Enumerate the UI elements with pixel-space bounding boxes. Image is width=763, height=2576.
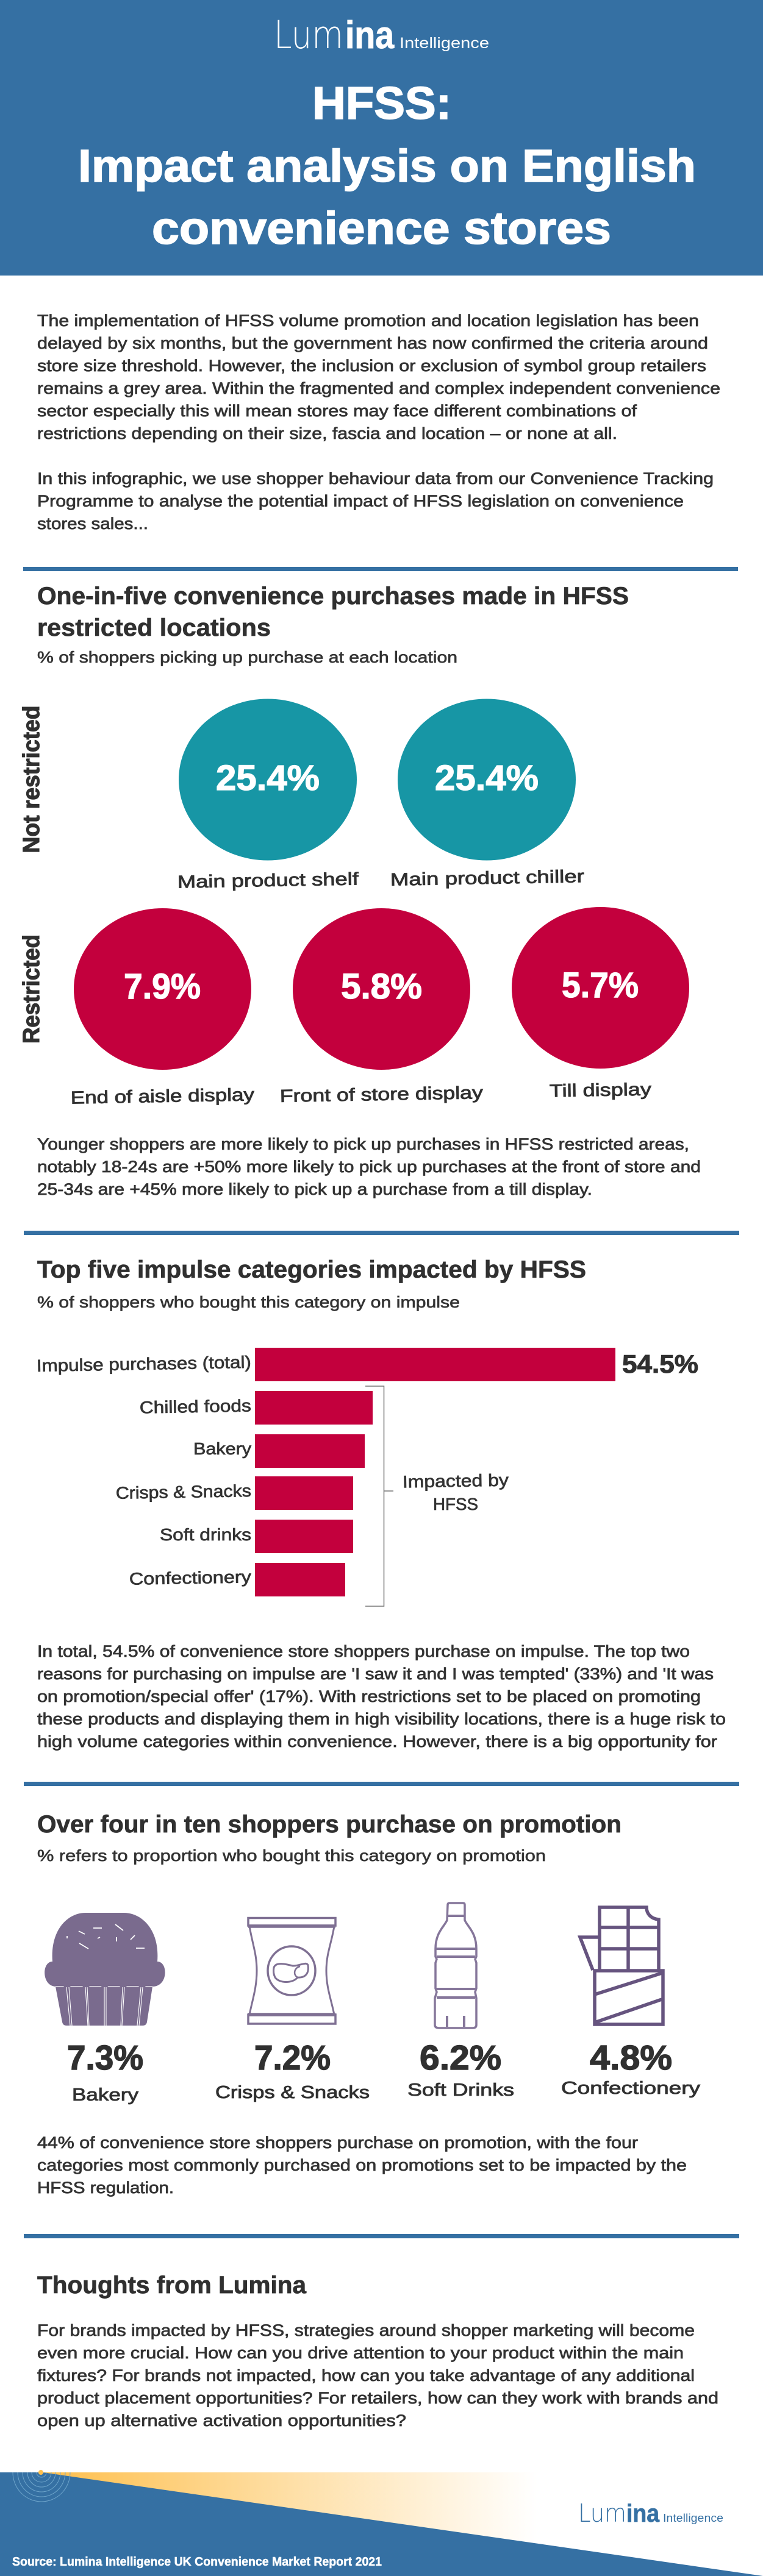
logo: Lumina Intelligence: ina [345, 14, 395, 57]
bar chart: Impulse purchases (total) [37, 1353, 251, 1375]
stat: bakery [67, 2038, 143, 2105]
bar chart: 54.5% [622, 1350, 698, 1378]
decoration: concentric arcs [13, 2472, 70, 2502]
bar chart: Chilled foods [140, 1396, 251, 1417]
text block: introduction: remains a grey area. Within the fragmented and complex independent convenience [37, 379, 720, 397]
stat: front of store display: Front of store display [280, 1083, 484, 1106]
stat: end of aisle display [71, 908, 255, 1108]
text block: promotion commentary [37, 2133, 687, 2197]
text block: introduction [37, 311, 720, 533]
text block: impulse commentary: reasons for purchasing on impulse are 'I saw it and I was tempted' (33%) and 'It was [37, 1665, 714, 1683]
text block: introduction: sector especially this will mean stores may face different combinations of [37, 402, 637, 420]
panel: purchase locations [19, 583, 701, 1198]
stat: bakery: Bakery [72, 2085, 139, 2105]
stat: confectionery: Confectionery [561, 2079, 701, 2098]
stat: crisps and snacks: 7.2% [254, 2038, 331, 2077]
stat: end of aisle display: End of aisle display [71, 1085, 255, 1108]
label: not restricted: Not restricted [19, 706, 45, 853]
text block: promotion commentary: categories most commonly purchased on promotions set to be impacted by the [37, 2156, 687, 2174]
subheading: % of shoppers picking up purchase at each location [37, 648, 457, 666]
logo: Lumina Intelligence footer: Intelligence [663, 2512, 723, 2524]
stat: soft drinks [407, 2038, 514, 2100]
text block: younger shoppers: 25-34s are +45% more likely to pick up a purchase from a till display. [37, 1180, 592, 1198]
heading: one-in-five [37, 583, 629, 641]
text block: introduction: store size threshold. However, the inclusion or exclusion of symbol group retailers [37, 357, 706, 375]
source: Source: Lumina Intelligence UK Convenience Market Report 2021 [12, 2555, 382, 2569]
icon: crisps bag [248, 1918, 335, 2024]
text block: introduction: In this infographic, we use shopper behaviour data from our Convenience Tracking [37, 469, 714, 488]
title [78, 77, 696, 254]
icon: cupcake [45, 1913, 165, 2026]
panel: impulse categories [37, 1256, 726, 1751]
panel: header [0, 0, 763, 276]
text block: introduction: restrictions depending on their size, fascia and location – or none at all. [37, 424, 617, 443]
icon: bottle [435, 1903, 476, 2028]
stat: soft drinks: Soft Drinks [407, 2080, 514, 2100]
text block: introduction: Programme to analyse the potential impact of HFSS legislation on convenience [37, 492, 684, 510]
text block: introduction: delayed by six months, but the government has now confirmed the criteria around [37, 334, 708, 352]
text block: impulse commentary: high volume categories within convenience. However, there is a big opportunity for [37, 1732, 717, 1751]
stat: soft drinks: 6.2% [420, 2038, 501, 2077]
text block: introduction: The implementation of HFSS volume promotion and location legislation has been [37, 311, 699, 330]
bar chart: Confectionery [129, 1567, 251, 1589]
stat: main product shelf: Main product shelf [177, 869, 359, 892]
bar chart: Bakery [193, 1439, 251, 1458]
heading: over four in ten: Over four in ten shoppers purchase on promotion [37, 1811, 622, 1838]
stat: main product shelf: 25.4% [216, 758, 320, 798]
bracket: impacted by HFSS [365, 1386, 509, 1606]
stat: till display [512, 907, 689, 1101]
stat: main product shelf [177, 699, 359, 892]
heading: top five: Top five impulse categories impacted by HFSS [37, 1256, 586, 1283]
text block: thoughts: fixtures? For brands not impacted, how can you take advantage of any additional [37, 2366, 695, 2385]
stat: till display: 5.7% [562, 966, 639, 1005]
heading: thoughts: Thoughts from Lumina [37, 2272, 307, 2299]
heading: one-in-five: restricted locations [37, 614, 271, 641]
text block: impulse commentary: In total, 54.5% of convenience store shoppers purchase on impulse. The top two [37, 1642, 690, 1660]
logo: Lumina Intelligence [274, 13, 489, 57]
text block: younger shoppers: notably 18-24s are +50% more likely to pick up purchases at the front of store and [37, 1158, 701, 1176]
logo: Lumina Intelligence footer [578, 2499, 723, 2528]
stat: bakery: 7.3% [67, 2038, 143, 2077]
stat: main product chiller: 25.4% [435, 758, 539, 798]
subheading: % of shoppers who bought this category on impulse [37, 1293, 460, 1311]
logo: Lumina Intelligence footer: Lum [578, 2499, 626, 2528]
panel: promotion [37, 1811, 701, 2197]
logo: Lumina Intelligence footer: ina [626, 2499, 660, 2527]
bar chart [37, 1348, 698, 1596]
text block: thoughts: even more crucial. How can you drive attention to your product within the main [37, 2344, 684, 2362]
panel: footer [0, 2470, 763, 2576]
text block: thoughts: For brands impacted by HFSS, strategies around shopper marketing will become [37, 2321, 695, 2339]
title: Impact analysis on English [78, 140, 696, 191]
bar chart: Crisps & Snacks [116, 1481, 251, 1503]
text block: younger shoppers [37, 1135, 701, 1198]
stat: crisps and snacks: Crisps & Snacks [215, 2083, 370, 2102]
stat: front of store display [280, 908, 484, 1106]
text block: impulse commentary: these products and displaying them in high visibility locations, there is a huge risk to [37, 1710, 726, 1728]
text block: thoughts: open up alternative activation opportunities? [37, 2411, 406, 2430]
stat: front of store display: 5.8% [341, 967, 422, 1006]
stat: crisps and snacks [215, 2038, 370, 2102]
bar chart: Soft drinks [160, 1525, 251, 1544]
logo: Lumina Intelligence: Intelligence [399, 35, 489, 52]
stat: confectionery: 4.8% [590, 2038, 672, 2077]
text block: thoughts: product placement opportunities? For retailers, how can they work with brands and [37, 2389, 718, 2407]
title: convenience stores [152, 202, 611, 254]
icon: chocolate bar [580, 1907, 663, 2024]
label: restricted: Restricted [19, 934, 45, 1044]
bracket: impacted by HFSS: Impacted by [403, 1470, 509, 1492]
logo: Lumina Intelligence: Lum [274, 13, 343, 57]
stat: end of aisle display: 7.9% [124, 967, 201, 1006]
stat: confectionery [561, 2038, 701, 2098]
text block: younger shoppers: Younger shoppers are more likely to pick up purchases in HFSS restricted areas, [37, 1135, 689, 1153]
panel: thoughts from Lumina [37, 2272, 718, 2430]
stat: main product chiller [390, 699, 585, 890]
stat: main product chiller: Main product chiller [390, 867, 585, 890]
text block: thoughts [37, 2321, 718, 2430]
subheading: % refers to proportion who bought this category on promotion [37, 1846, 546, 1865]
bracket: impacted by HFSS: HFSS [433, 1495, 478, 1514]
heading: one-in-five: One-in-five convenience purchases made in HFSS [37, 583, 629, 610]
icon: orange dot [38, 2470, 43, 2475]
text block: introduction: stores sales... [37, 514, 148, 533]
text block: promotion commentary: 44% of convenience store shoppers purchase on promotion, with the four [37, 2133, 638, 2152]
title: HFSS: [312, 77, 451, 129]
text block: promotion commentary: HFSS regulation. [37, 2179, 174, 2197]
text block: impulse commentary [37, 1642, 726, 1751]
stat: till display: Till display [550, 1080, 652, 1101]
text block: impulse commentary: on promotion/special offer' (17%). With restrictions set to be placed on promoting [37, 1687, 701, 1706]
